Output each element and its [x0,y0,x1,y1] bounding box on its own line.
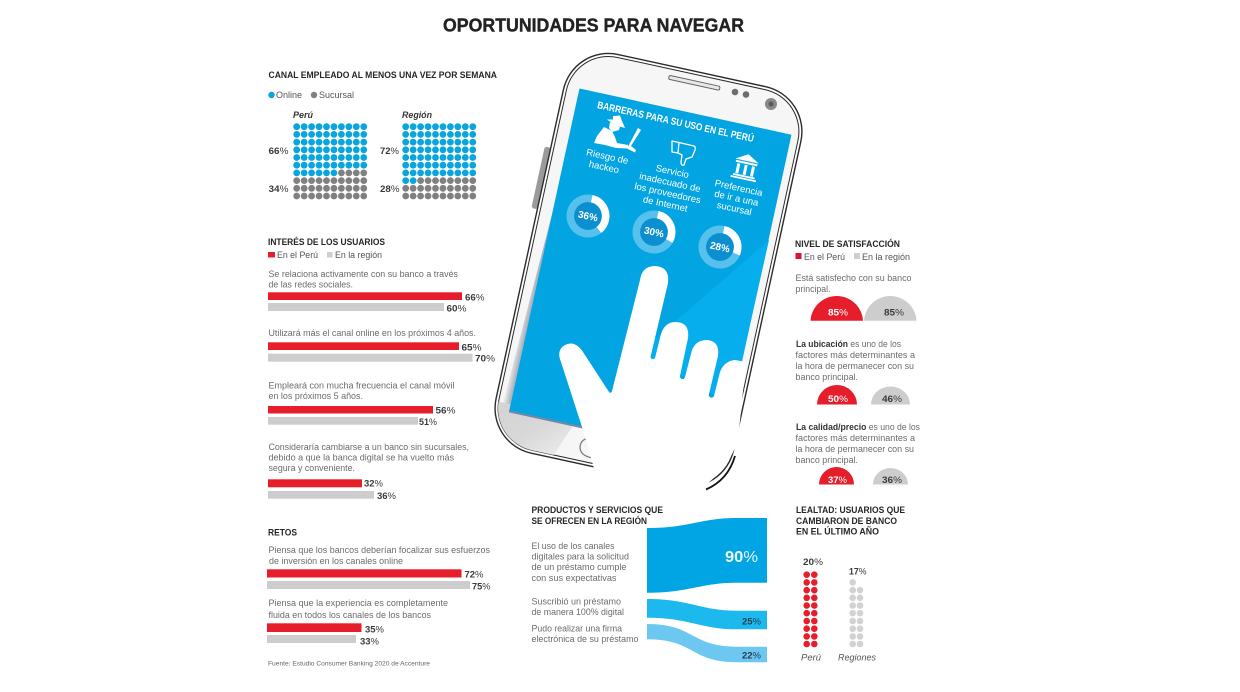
item: canal móvil: Empleará con mucha frecuencia el canal móvil [268,380,454,390]
legend: interés [268,250,382,260]
label: Perú: Perú [293,110,313,120]
flow: 25% [647,599,767,629]
heading: lealtad: CAMBIARON DE BANCO [796,516,897,526]
text: canales digitales: El uso de los canales [532,541,615,551]
heading: productos: PRODUCTOS Y SERVICIOS QUE [532,505,663,515]
donut: 36% [567,195,609,237]
flow: 22%: 22% [742,650,762,662]
text: préstamo digital: de manera 100% digital [532,607,624,617]
item: calidad precio: banco principal. [796,455,858,465]
flow: 90% [647,518,767,593]
item: inversión online: Piensa que los bancos deberían focalizar sus esfuerzos [268,545,490,555]
item: canal móvil: 56% [436,406,456,416]
label: preferencia sucursal: sucursal [716,200,753,218]
item: experiencia fluida: fluida en todos los canales de los bancos [268,610,431,620]
heading: interés: INTERÉS DE LOS USUARIOS [268,237,385,247]
item: calidad precio: factores más determinantes a [796,433,915,443]
label: riesgo de hackeo: Riesgo de [585,147,629,167]
heading: productos: SE OFRECEN EN LA REGIÓN [532,515,647,526]
donut: 30% [633,211,675,253]
value: Perú sucursal: 34% [268,184,289,195]
item: experiencia fluida: 33% [360,636,380,648]
label: riesgo de hackeo: hackeo [588,159,620,176]
phone corner highlight [706,456,735,490]
label: preferencia sucursal: Preferencia [714,178,764,199]
panel: productos y servicios [532,505,767,662]
item: canal móvil: en los próximos 5 años. [268,391,363,401]
source note: Fuente: Estudio Consumer Banking 2020 de Accenture [268,660,430,668]
value: Región online: 72% [380,146,400,157]
item: banco sin sucursales: Consideraría cambiarse a un banco sin sucursales, [268,442,469,452]
label: servicio inadecuado: los proveedores [633,181,702,206]
value: Región sucursal: 28% [380,184,400,195]
item: banco sin sucursales: 32% [364,478,384,490]
text: canales digitales: de un préstamo cumple [532,562,626,572]
item: satisfecho: principal. [796,284,830,294]
item: canal online: Utilizará más el canal online en los próximos 4 años. [268,328,476,338]
item: canal online [268,328,496,364]
item: redes sociales [268,269,485,314]
heading: productos [532,505,663,526]
legend: satisfacción [796,252,910,262]
phone body [494,52,803,483]
item: redes sociales: 60% [446,304,467,314]
item: calidad precio [796,422,920,486]
phone speaker [668,75,720,90]
heading: barreras: BARRERAS PARA SU USO EN EL PERÚ [596,98,755,145]
legend: interés: En la región [335,250,382,260]
item: ubicación: la hora de permanecer con su [796,361,914,371]
label: Región: Región [402,110,432,120]
item: inversión online [267,545,491,592]
text: firma electrónica: Pudo realizar una firma [532,624,622,634]
item: ubicación: banco principal. [796,372,858,382]
heading: lealtad: EN EL ÚLTIMO AÑO [796,526,879,536]
dots: Perú [803,571,818,647]
label: servicio inadecuado: Servicio [655,163,690,181]
label: preferencia sucursal: de ir a una [713,189,760,209]
text: préstamo digital [532,596,624,617]
phone sensors [732,89,777,110]
item: redes sociales: 66% [465,292,485,304]
item: ubicación [796,339,915,405]
hand pointing [559,266,746,498]
item: canal móvil: 51% [419,417,438,428]
label: servicio inadecuado [631,159,707,217]
value: lealtad Perú: 20% [803,557,824,568]
panel: interés de los usuarios [268,237,496,502]
legend: online and sucursal: Sucursal [319,90,354,100]
donut: 28%: 28% [709,240,731,256]
legend: satisfacción: En la región [862,252,910,262]
donut: 30%: 30% [643,225,665,241]
donut: 28% [699,226,741,268]
phone screen [509,88,791,459]
text: firma electrónica: electrónica de su préstamo [532,634,638,644]
phone side button [531,146,551,209]
heading: lealtad: LEALTAD: USUARIOS QUE [796,505,905,515]
item: banco sin sucursales: segura y conveniente. [268,463,355,473]
item: satisfecho: 85% [884,308,905,318]
item: experiencia fluida: Piensa que la experiencia es completamente [268,598,448,608]
heading: canal empleado: CANAL EMPLEADO AL MENOS UNA VEZ POR SEMANA [268,70,497,80]
flow: 22% [647,624,767,662]
label: servicio inadecuado: inadecuado de [638,171,701,195]
text: canales digitales: digitales para la solicitud [532,552,629,562]
text: firma electrónica [532,624,638,644]
item: experiencia fluida [267,598,448,648]
dot grid: Región 72 online 28 sucursal [402,123,476,199]
icon: thumbs down [672,141,695,165]
item: ubicación: 46% [882,394,903,405]
panel: retos [267,528,491,668]
legend: online and sucursal: Online [276,90,302,100]
value: lealtad Regiones: 17% [849,566,867,578]
icon: bank [730,152,761,182]
item: experiencia fluida: 35% [365,624,385,636]
item: banco sin sucursales: 36% [377,491,397,502]
item: inversión online: de inversión en los canales online [269,556,403,566]
item: satisfecho: 85% [828,308,849,318]
heading: lealtad [796,505,905,536]
panel: nivel de satisfacción [795,238,920,486]
label: Regiones lealtad: Regiones [838,652,876,662]
item: satisfecho [796,273,916,321]
item: calidad precio: 36% [882,475,903,486]
label: servicio inadecuado: de Internet [642,194,689,215]
item: ubicación: La ubicación es uno de los [796,339,901,349]
heading: satisfacción: NIVEL DE SATISFACCIÓN [795,238,900,249]
item: calidad precio: La calidad/precio es uno de los [796,422,920,432]
item: satisfecho: Está satisfecho con su banco [796,273,912,283]
home button outline [580,438,594,458]
text: canales digitales [532,541,629,583]
value: Perú online: 66% [268,146,289,157]
title: OPORTUNIDADES PARA NAVEGAR [443,14,744,36]
item: inversión online: 72% [464,570,484,580]
legend: interés: En el Perú [277,250,318,260]
item: redes sociales: de las redes sociales. [268,280,353,290]
item: ubicación: factores más determinantes a [796,350,915,360]
donut: 36%: 36% [577,209,599,225]
flow: 90%: 90% [725,549,758,566]
item: banco sin sucursales [268,442,469,502]
panel: lealtad [796,505,905,662]
heading: retos: RETOS [268,528,297,538]
panel: barreras [567,98,764,268]
phone illustration [494,52,803,483]
text: préstamo digital: Suscribió un préstamo [532,596,621,606]
dot grid: Perú 66 online 34 sucursal [293,123,367,199]
item: banco sin sucursales: debido a que la banca digital se ha vuelto más [268,452,454,462]
item: ubicación: 50% [828,394,849,405]
item: calidad precio: 37% [828,475,848,486]
item: canal online: 65% [462,342,482,354]
label: riesgo de hackeo [583,147,629,178]
legend: online and sucursal [268,90,354,100]
icon: hacker [594,116,641,152]
text: canales digitales: con sus expectativas [532,573,617,583]
item: canal online: 70% [475,354,496,364]
item: inversión online: 75% [472,582,491,592]
item: canal móvil [268,380,456,428]
item: redes sociales: Se relaciona activamente con su banco a través [268,269,458,279]
label: Perú lealtad: Perú [801,652,821,662]
panel: canal empleado [268,70,497,199]
flow: 25%: 25% [742,616,762,628]
label: preferencia sucursal [709,178,764,220]
dots: Regiones [849,579,863,647]
item: calidad precio: la hora de permanecer con su [796,444,914,454]
legend: satisfacción: En el Perú [804,252,845,262]
